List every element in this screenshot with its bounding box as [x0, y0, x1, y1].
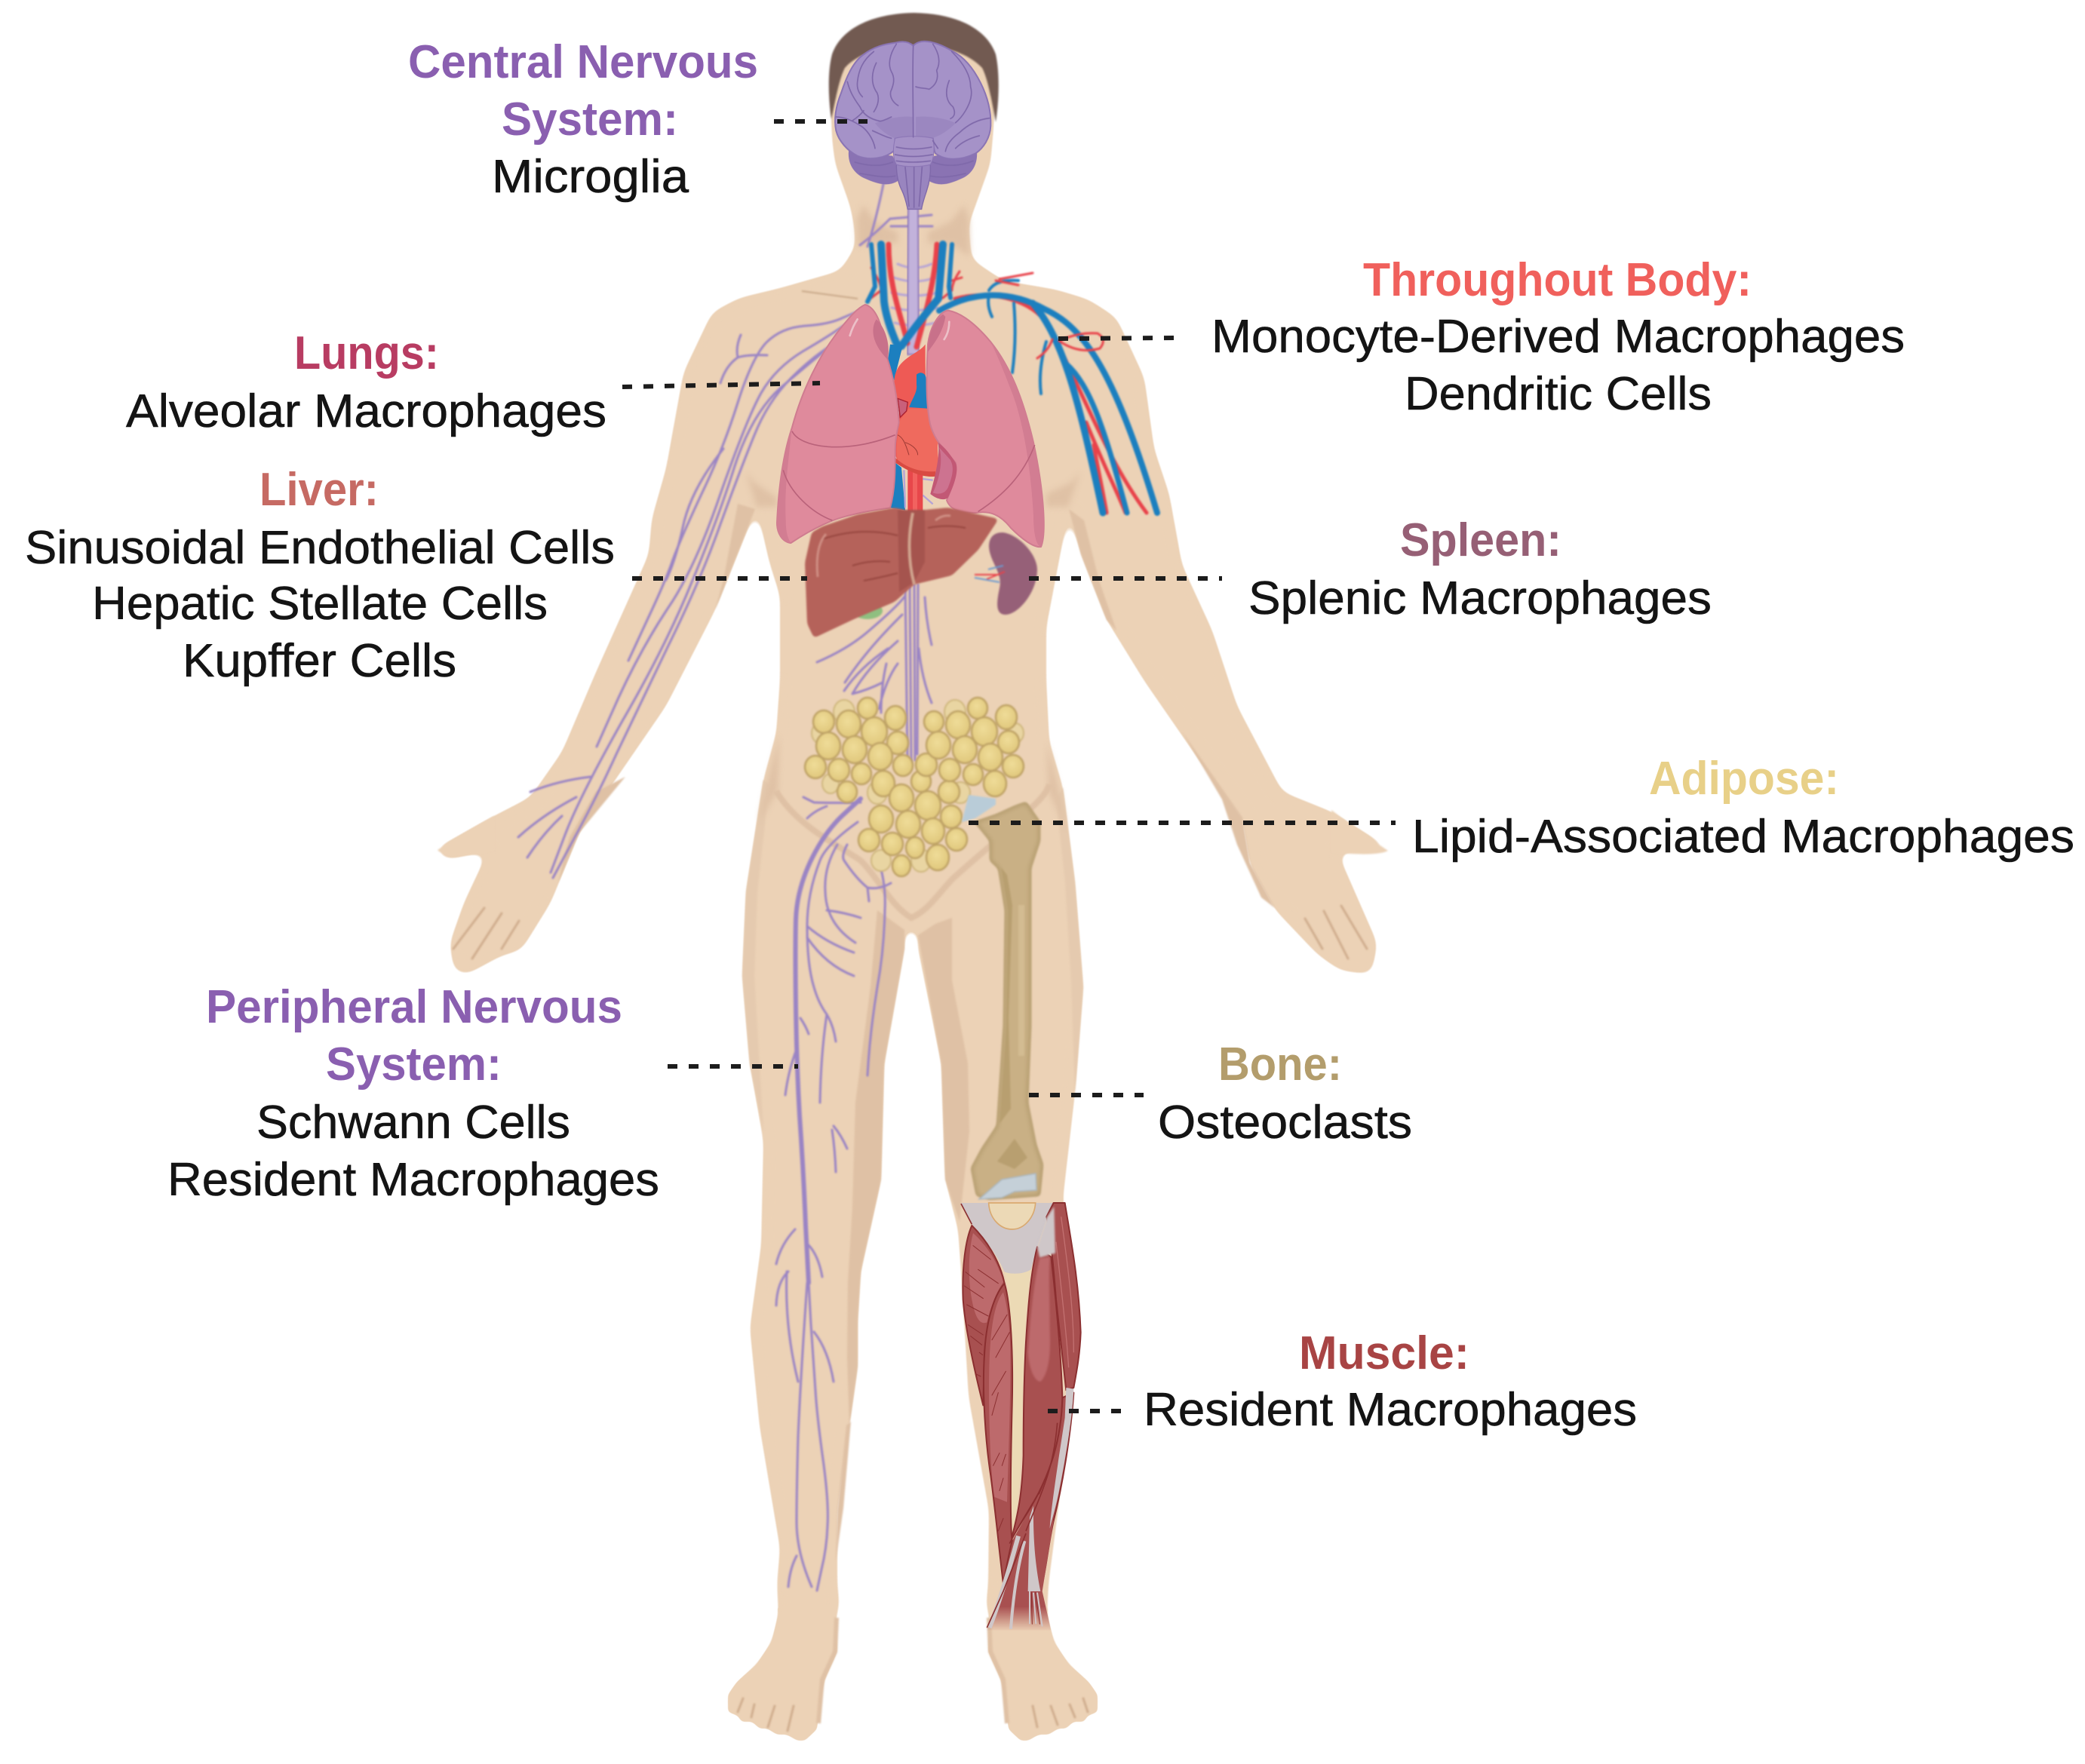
label: bone: Bone:	[1218, 1038, 1342, 1091]
muscle: lower outer	[1027, 1393, 1073, 1594]
knee tendon	[961, 1203, 1055, 1274]
label: throughout body: Throughout Body:	[1363, 254, 1752, 306]
label: lungs: Lungs:	[294, 327, 439, 379]
label: liver: Sinusoidal Endothelial Cells	[25, 522, 615, 574]
aorta	[907, 470, 923, 511]
heart	[894, 345, 938, 477]
neck and arm blood vessels	[867, 244, 1157, 513]
label: peripheral nervous system: Peripheral Nervous	[206, 981, 622, 1033]
label: throughout body	[1211, 254, 1905, 420]
tibia	[1005, 1269, 1031, 1541]
cerebellum	[849, 151, 977, 184]
liver	[805, 508, 999, 638]
knee cartilage	[979, 1173, 1036, 1199]
tendons	[1050, 1388, 1073, 1529]
lungs, heart and great vessels	[777, 305, 1044, 547]
sulci	[911, 46, 915, 137]
leader line: adipose	[969, 821, 1396, 825]
venous junction	[888, 345, 903, 381]
label: peripheral nervous system: System:	[326, 1038, 502, 1091]
body silhouette	[433, 19, 1393, 1741]
adipose tissue	[805, 698, 1024, 876]
label: lungs: Alveolar Macrophages	[126, 385, 606, 437]
spinal cord	[907, 204, 919, 354]
label: lungs	[126, 327, 606, 437]
label: muscle: Muscle:	[1299, 1327, 1469, 1379]
background fat cells	[812, 700, 1024, 872]
thumbs	[438, 810, 1388, 855]
leader line: throughout body	[1058, 338, 1174, 339]
label: liver: Liver:	[259, 464, 379, 516]
leader line: central nervous system	[774, 119, 867, 124]
label: spleen	[1248, 514, 1712, 624]
label: muscle: Resident Macrophages	[1144, 1384, 1637, 1436]
muscle: outer calf	[1046, 1203, 1081, 1390]
nerves: arm, torso and leg peripheral nervous system	[518, 161, 938, 1591]
label: peripheral nervous system	[167, 981, 659, 1206]
frontal lower shade	[875, 117, 956, 138]
label: liver: Hepatic Stellate Cells	[92, 578, 548, 630]
label: central nervous system	[408, 36, 758, 203]
spleen	[975, 532, 1037, 615]
muscle: lateral upper	[963, 1226, 1005, 1405]
label: peripheral nervous system: Resident Macrophages	[167, 1154, 659, 1206]
muscle: lower leg base	[987, 1493, 1054, 1631]
cerebrum	[835, 41, 990, 159]
lung fissures	[783, 431, 1035, 520]
label: adipose	[1412, 753, 2074, 863]
muscle: gastrocnemius	[1011, 1247, 1062, 1541]
brain	[835, 41, 990, 209]
label: bone	[1158, 1038, 1412, 1149]
lung rim shading	[990, 342, 1044, 547]
leader line: peripheral nervous system	[668, 1064, 798, 1069]
feet	[728, 1606, 1098, 1741]
pons	[893, 137, 934, 167]
leader line: liver	[632, 576, 807, 581]
human body figure	[433, 13, 1393, 1741]
lower leg muscles	[961, 1203, 1081, 1631]
gallbladder	[852, 603, 883, 619]
label: muscle	[1144, 1327, 1637, 1436]
left lung	[777, 305, 899, 543]
right lung	[927, 311, 1044, 547]
leader line: muscle	[1048, 1409, 1130, 1413]
patella	[989, 1203, 1036, 1229]
label: liver: Kupffer Cells	[183, 635, 456, 687]
hair	[829, 13, 999, 122]
nerves: spinal branches at the throat	[892, 264, 938, 326]
body shading	[453, 205, 1367, 1731]
leader line: lungs	[622, 383, 820, 387]
hip cartilage	[962, 795, 996, 822]
label: adipose: Adipose:	[1649, 753, 1839, 805]
label: central nervous system: Central Nervous	[408, 36, 758, 88]
leader line: bone	[1029, 1093, 1144, 1097]
lung hilum	[873, 319, 889, 360]
label: throughout body: Monocyte-Derived Macrophages	[1211, 311, 1905, 363]
label: throughout body: Dendritic Cells	[1405, 368, 1712, 420]
label: central nervous system: System:	[502, 94, 678, 146]
brain stem	[896, 164, 930, 209]
label: liver	[25, 464, 615, 687]
femur bone	[962, 795, 1042, 1199]
label: spleen: Spleen:	[1400, 514, 1561, 566]
inferior vena cava	[890, 462, 905, 511]
muscle: tibialis	[984, 1284, 1012, 1584]
foreground fat cells	[805, 698, 1024, 876]
label: central nervous system: Microglia	[492, 151, 689, 203]
label: spleen: Splenic Macrophages	[1248, 572, 1712, 624]
leader line: spleen	[1029, 576, 1222, 581]
label: peripheral nervous system: Schwann Cells	[256, 1097, 570, 1149]
label: bone: Osteoclasts	[1158, 1097, 1412, 1149]
label: adipose: Lipid-Associated Macrophages	[1412, 811, 2074, 863]
